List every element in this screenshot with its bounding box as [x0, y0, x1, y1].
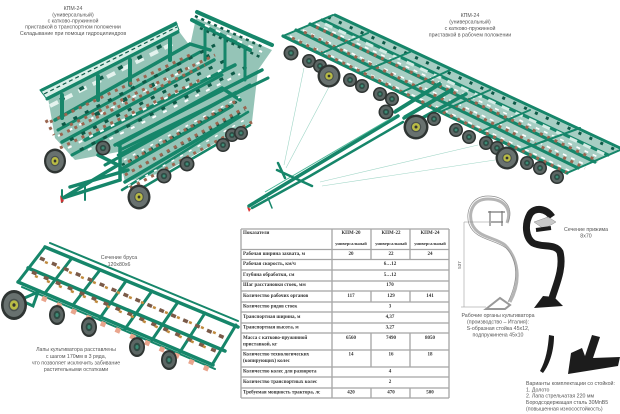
table: specifications: 7490 — [386, 336, 396, 341]
table: specifications: Транспортная ширина, м — [243, 315, 301, 320]
caption: shank spacing: Лапы культиватора расставлены — [36, 347, 116, 353]
title: working position caption: с катково-пружинной — [445, 25, 495, 32]
table: specifications: 3,27 — [386, 326, 395, 330]
table: specifications: Показатели — [243, 231, 270, 236]
table: specifications: приставкой, кг — [243, 342, 278, 348]
table: specifications: 5…12 — [384, 273, 397, 278]
title: folded machine caption: (универсальный) — [52, 12, 94, 18]
drawing: S-shaped shank outline — [457, 196, 517, 309]
illustration: cultivator in working position — [247, 15, 620, 212]
table: specifications: Глубина обработки, см — [243, 273, 295, 278]
table: specifications: 20 — [348, 252, 354, 257]
caption: working organs — [461, 313, 535, 338]
drawing: black S-shaped shank — [526, 209, 563, 308]
caption: working organs: (производство – Италия): — [467, 320, 529, 326]
caption: configuration variants: Бородсодержащая сталь 30MnB5 — [526, 400, 608, 406]
title: working position caption: приставкой в рабочем положении — [429, 32, 511, 38]
table: specifications: Транспортная высота, м — [243, 326, 299, 330]
table: specifications: Количество рядов стоек — [243, 304, 297, 310]
caption: beam section — [101, 255, 137, 268]
table: specifications: 18 — [428, 352, 433, 358]
rust-coloured shanks — [32, 258, 225, 372]
caption: clamp section — [564, 227, 608, 240]
table: specifications: 4 — [389, 370, 392, 374]
frame — [283, 15, 620, 175]
table: specifications: Количество колес для разворота — [243, 370, 317, 374]
table: specifications: Количество транспортных колес — [243, 380, 318, 385]
table: specifications: 8050 — [425, 336, 436, 341]
table: specifications: 170 — [386, 283, 394, 288]
hitch — [60, 155, 128, 203]
caption: configuration variants — [526, 380, 615, 412]
table: specifications: Количество технологических — [243, 352, 310, 358]
icon: chisel — [540, 335, 554, 373]
wheels — [1, 290, 177, 370]
table: specifications: 500 — [426, 390, 434, 396]
frame — [18, 243, 238, 369]
table: specifications: 470 — [387, 390, 395, 396]
title: working position caption: КПМ-24 — [461, 13, 479, 19]
table: specifications: 420 — [347, 390, 355, 396]
table: specifications: КПМ-22 — [382, 231, 401, 236]
title: folded machine caption: Складывание при помощи гидроцилиндров — [20, 31, 126, 37]
icon: duckfoot share — [568, 335, 620, 374]
caption: clamp section: Сечение прижима — [564, 227, 608, 233]
table: specifications: 4,37 — [386, 315, 395, 320]
table: specifications: 14 — [348, 352, 354, 358]
silhouette — [48, 18, 272, 182]
table: specifications: Количество рабочих органов — [243, 294, 309, 299]
table: specifications: (копирующих) колес — [243, 359, 291, 364]
title: folded machine caption: приставкой в транспортном положении — [25, 24, 121, 30]
table: specifications: универсальный — [375, 241, 407, 246]
caption: shank spacing — [32, 347, 120, 373]
table: specifications: 16 — [388, 352, 394, 358]
caption: shank spacing: что позволяет исключить забивание — [32, 360, 120, 366]
hydraulic hoses — [284, 68, 495, 186]
table: specifications: 6560 — [346, 336, 356, 341]
title: folded machine caption — [20, 6, 126, 37]
caption: shank spacing: растительными остатками — [44, 367, 108, 373]
wheels — [44, 148, 66, 174]
table: specifications: Требуемая мощность трактора, лс — [243, 390, 321, 396]
upper right wing — [192, 12, 272, 80]
caption: configuration variants: (повышенная износостойкость) — [526, 406, 603, 412]
table: specifications: Рабочая ширина захвата, м — [243, 252, 306, 257]
drawbar — [247, 116, 403, 212]
caption: beam section: 120х80х6 — [108, 262, 130, 268]
table: specifications: 22 — [388, 252, 394, 257]
table: specifications: Шаг расстановки стоек, мм — [243, 283, 306, 288]
table: specifications: 117 — [347, 294, 355, 299]
dimension label: 537 — [457, 261, 462, 269]
title: folded machine caption: с катково-пружинной — [48, 18, 98, 24]
front rows — [46, 55, 252, 195]
table: specifications: 141 — [426, 294, 434, 299]
table: specifications: Масса с катково-пружинной — [243, 336, 307, 341]
table: specifications: 3 — [389, 304, 392, 310]
caption: working organs: S-образная стойка 45х12, — [467, 325, 529, 332]
caption: configuration variants: Варианты комплектации со стойкой: — [526, 380, 615, 387]
table: specifications: КПМ-24 — [421, 231, 440, 236]
title: working position caption — [429, 13, 511, 38]
caption: working organs: подпружинена 45х10 — [473, 332, 524, 338]
caption: shank spacing: с шагом 170мм в 3 ряда, — [46, 354, 106, 360]
table: specifications: 24 — [428, 252, 433, 257]
table: specifications — [241, 229, 449, 398]
illustration: cultivator section — [1, 243, 238, 372]
caption: configuration variants: 1. Долото — [526, 388, 550, 394]
title: working position caption: (универсальный) — [449, 18, 491, 26]
table: specifications: КПМ-20 — [342, 231, 361, 236]
table: specifications: универсальный — [335, 241, 367, 246]
wheels — [284, 46, 564, 184]
caption: working organs: Рабочие органы культиватора — [461, 313, 535, 319]
middle rows — [55, 44, 268, 165]
table: specifications: 6…12 — [384, 262, 397, 267]
rear folded wing — [40, 22, 179, 118]
caption: configuration variants: 2. Лапа стрельчатая 220 мм — [526, 394, 594, 400]
table: specifications: универсальный — [414, 241, 446, 246]
table: specifications: 129 — [387, 294, 395, 299]
caption: clamp section: 8х70 — [580, 234, 592, 240]
table: specifications: Рабочая скорость, км/ч — [243, 262, 296, 267]
title: folded machine caption: КПМ-24 — [64, 6, 82, 12]
caption: beam section: Сечение бруса — [101, 255, 137, 261]
table: specifications: 2 — [389, 380, 392, 385]
illustration: cultivator in transport position — [40, 12, 272, 210]
